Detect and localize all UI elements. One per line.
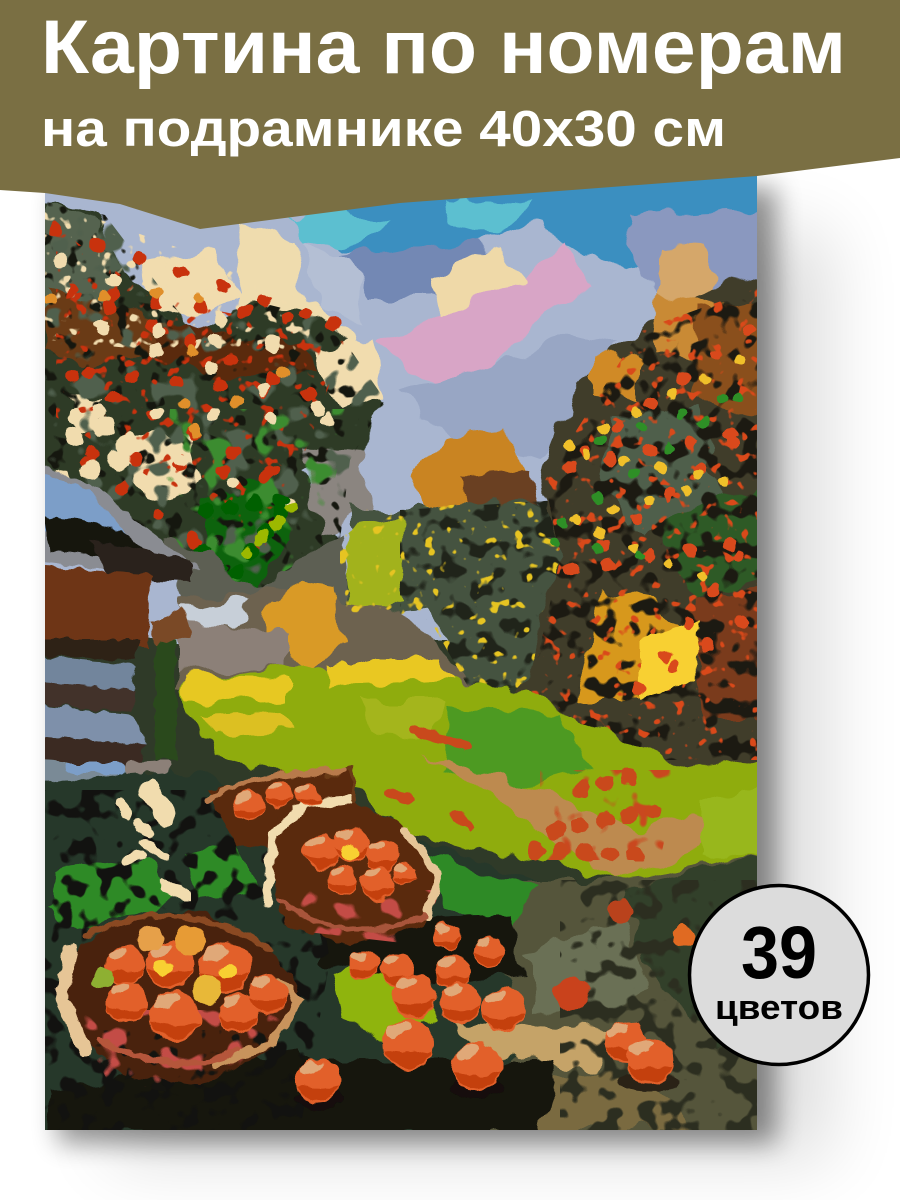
painting: baskets of apples [62,768,440,1095]
badge label: цветов [715,989,843,1027]
painting: foreground ground [30,770,780,1140]
painting: meadow [185,660,780,885]
painting: log house [45,465,200,782]
title: Картина по номерам [41,5,846,90]
canvas drop shadow [58,188,830,1160]
badge: number of colours [690,886,868,1064]
apples in front basket [92,925,288,1041]
painting: apple orchard [30,160,780,1140]
scattered apples on the path [390,730,660,855]
painting: left tree apples and leaf specks [50,230,350,580]
painting: right tree apples [540,330,750,690]
painting: background trees [165,430,570,690]
subtitle: на подрамнике 40х30 см [41,100,726,157]
painting: scattered apples on ground [296,899,694,1110]
painting: flowers in the grass [70,766,185,895]
apples in back and middle baskets [235,781,416,901]
badge number: 39 [741,911,817,994]
painting: sky [30,160,780,640]
painting: left apple tree [30,195,385,599]
painting: right apple tree [515,276,757,768]
header banner [0,0,900,229]
